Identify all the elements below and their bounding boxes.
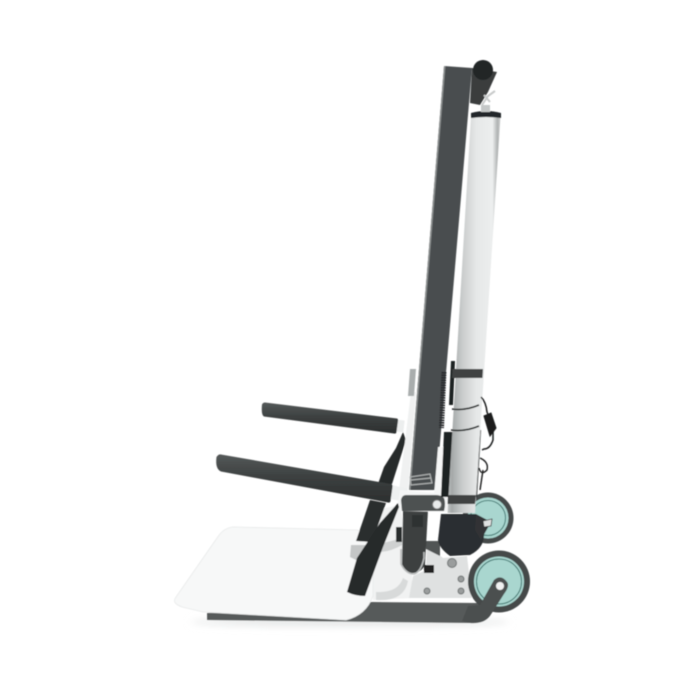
carriage bracket (398, 474, 449, 512)
actuator top cap (471, 111, 501, 118)
wheel arm (462, 577, 508, 623)
actuator rod (481, 105, 490, 112)
white lower mount plate and curved support (373, 505, 472, 600)
silver actuator tube (448, 116, 500, 513)
white right carriage strip (434, 447, 445, 495)
column left edge highlight (409, 66, 446, 490)
grey slider on carriage (408, 369, 416, 396)
spring cable (442, 372, 444, 428)
lower handle (216, 454, 408, 503)
base frame (207, 602, 488, 623)
actuator straps (448, 369, 483, 504)
platform bracket (350, 545, 367, 561)
small wheel axle nut (483, 519, 492, 527)
actuator housing (441, 361, 481, 497)
lower post (402, 510, 428, 573)
upper handle (262, 402, 405, 434)
mounting bolts (424, 558, 464, 594)
top pulley wheel (473, 60, 493, 80)
large front wheel (468, 550, 530, 612)
power cable with inline connector (479, 397, 496, 490)
cable ties (451, 405, 479, 430)
main column (409, 66, 472, 490)
actuator motor (438, 514, 491, 556)
front platform (174, 527, 373, 620)
post shading (412, 515, 423, 527)
rear safety strap (356, 500, 386, 542)
white carriage strip (399, 392, 416, 490)
ground shadow (190, 618, 510, 626)
latch pin (482, 91, 495, 105)
upper safety strap (378, 432, 406, 484)
top pulley mount (470, 68, 497, 105)
front safety strap (347, 503, 399, 596)
small rear wheel (462, 492, 514, 544)
U clip on post (401, 549, 424, 574)
